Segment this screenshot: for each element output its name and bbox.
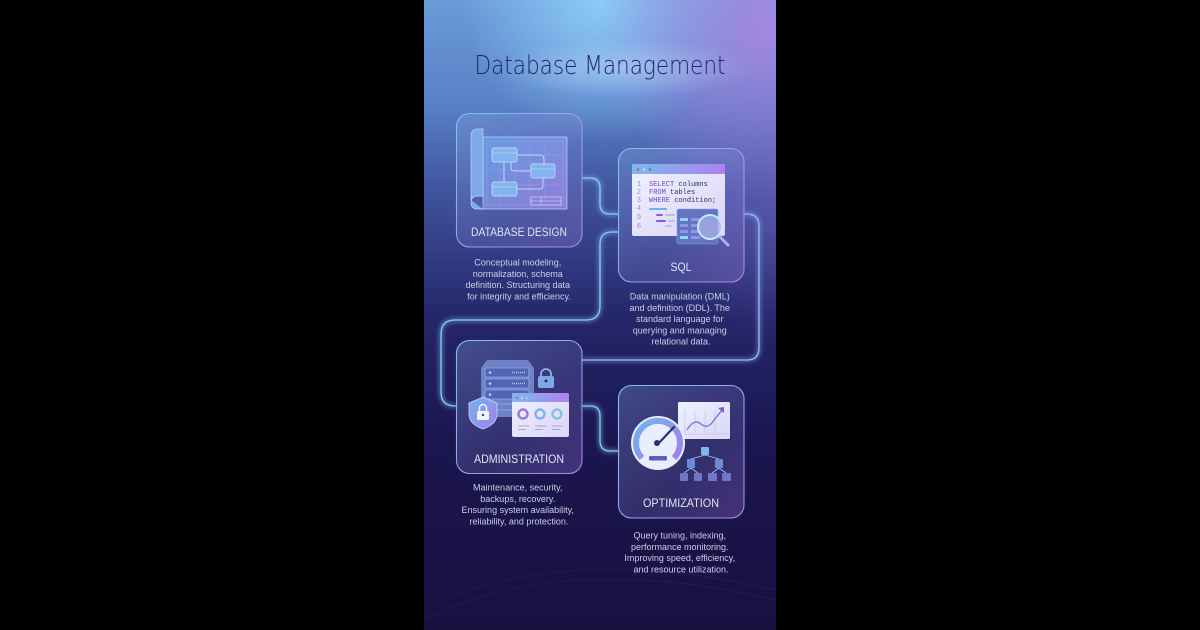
text: database design description: for integrity and efficiency. bbox=[467, 292, 571, 302]
connector: SQL to administration right side bbox=[582, 214, 759, 360]
icon: server, shield, lock and dashboard bbox=[469, 360, 569, 437]
icon: SQL editor with magnifier: 6 bbox=[637, 223, 641, 231]
icon: SQL editor with magnifier: 2 bbox=[637, 189, 641, 197]
icon: SQL editor with magnifier: 4 bbox=[637, 205, 641, 213]
connector: SQL to administration bbox=[441, 232, 618, 406]
text: optimization description: Query tuning, indexing, bbox=[633, 530, 726, 540]
icon: performance chart bbox=[678, 402, 730, 439]
text: database design description: normalization, schema bbox=[473, 269, 563, 279]
text: SQL description: standard language for bbox=[636, 314, 724, 324]
text: optimization description: performance monitoring. bbox=[631, 542, 729, 552]
label: database design: DATABASE DESIGN bbox=[471, 225, 567, 239]
icon: blueprint schema bbox=[471, 129, 567, 209]
icon: SQL editor with magnifier: WHERE condition; bbox=[649, 197, 716, 205]
text: SQL description: Data manipulation (DML) bbox=[630, 292, 730, 302]
text: database design description: definition. Structuring data bbox=[465, 280, 570, 290]
text: database design description: Conceptual modeling, bbox=[474, 258, 561, 268]
panel: database design bbox=[456, 114, 582, 247]
connector: design to SQL bbox=[582, 178, 618, 214]
text: administration description: backups, recovery. bbox=[480, 494, 555, 504]
icon: SQL editor with magnifier: SELECT columns bbox=[649, 181, 708, 189]
icon: SQL editor with magnifier: 5 bbox=[637, 214, 641, 222]
title: Database Management bbox=[474, 51, 726, 81]
text: SQL description: querying and managing bbox=[633, 325, 727, 335]
panel: SQL bbox=[618, 148, 744, 282]
icon: SQL editor with magnifier: 1 bbox=[637, 181, 641, 189]
label: SQL: SQL bbox=[670, 260, 692, 274]
background panel bbox=[424, 0, 776, 630]
connector: administration to optimization bbox=[582, 406, 618, 451]
panel: optimization bbox=[618, 386, 744, 518]
text: SQL description: and definition (DDL). The bbox=[630, 303, 730, 313]
text: optimization description: Improving speed, efficiency, bbox=[624, 553, 735, 563]
label: administration: ADMINISTRATION bbox=[474, 452, 564, 466]
icon: SQL editor with magnifier: FROM tables bbox=[649, 189, 695, 197]
text: SQL description: relational data. bbox=[651, 336, 711, 346]
icon: SQL editor with magnifier: 3 bbox=[637, 197, 641, 205]
text: administration description: Ensuring system availability, bbox=[462, 505, 574, 515]
label: optimization: OPTIMIZATION bbox=[643, 496, 719, 510]
icon: SQL editor with magnifier bbox=[632, 164, 728, 245]
text: administration description: Maintenance, security, bbox=[473, 482, 562, 492]
text: administration description: reliability, and protection. bbox=[470, 516, 568, 526]
icon: index tree bbox=[680, 447, 731, 481]
text: optimization description: and resource utilization. bbox=[633, 564, 729, 574]
panel: administration bbox=[456, 340, 582, 474]
icon: speed gauge bbox=[631, 416, 685, 470]
